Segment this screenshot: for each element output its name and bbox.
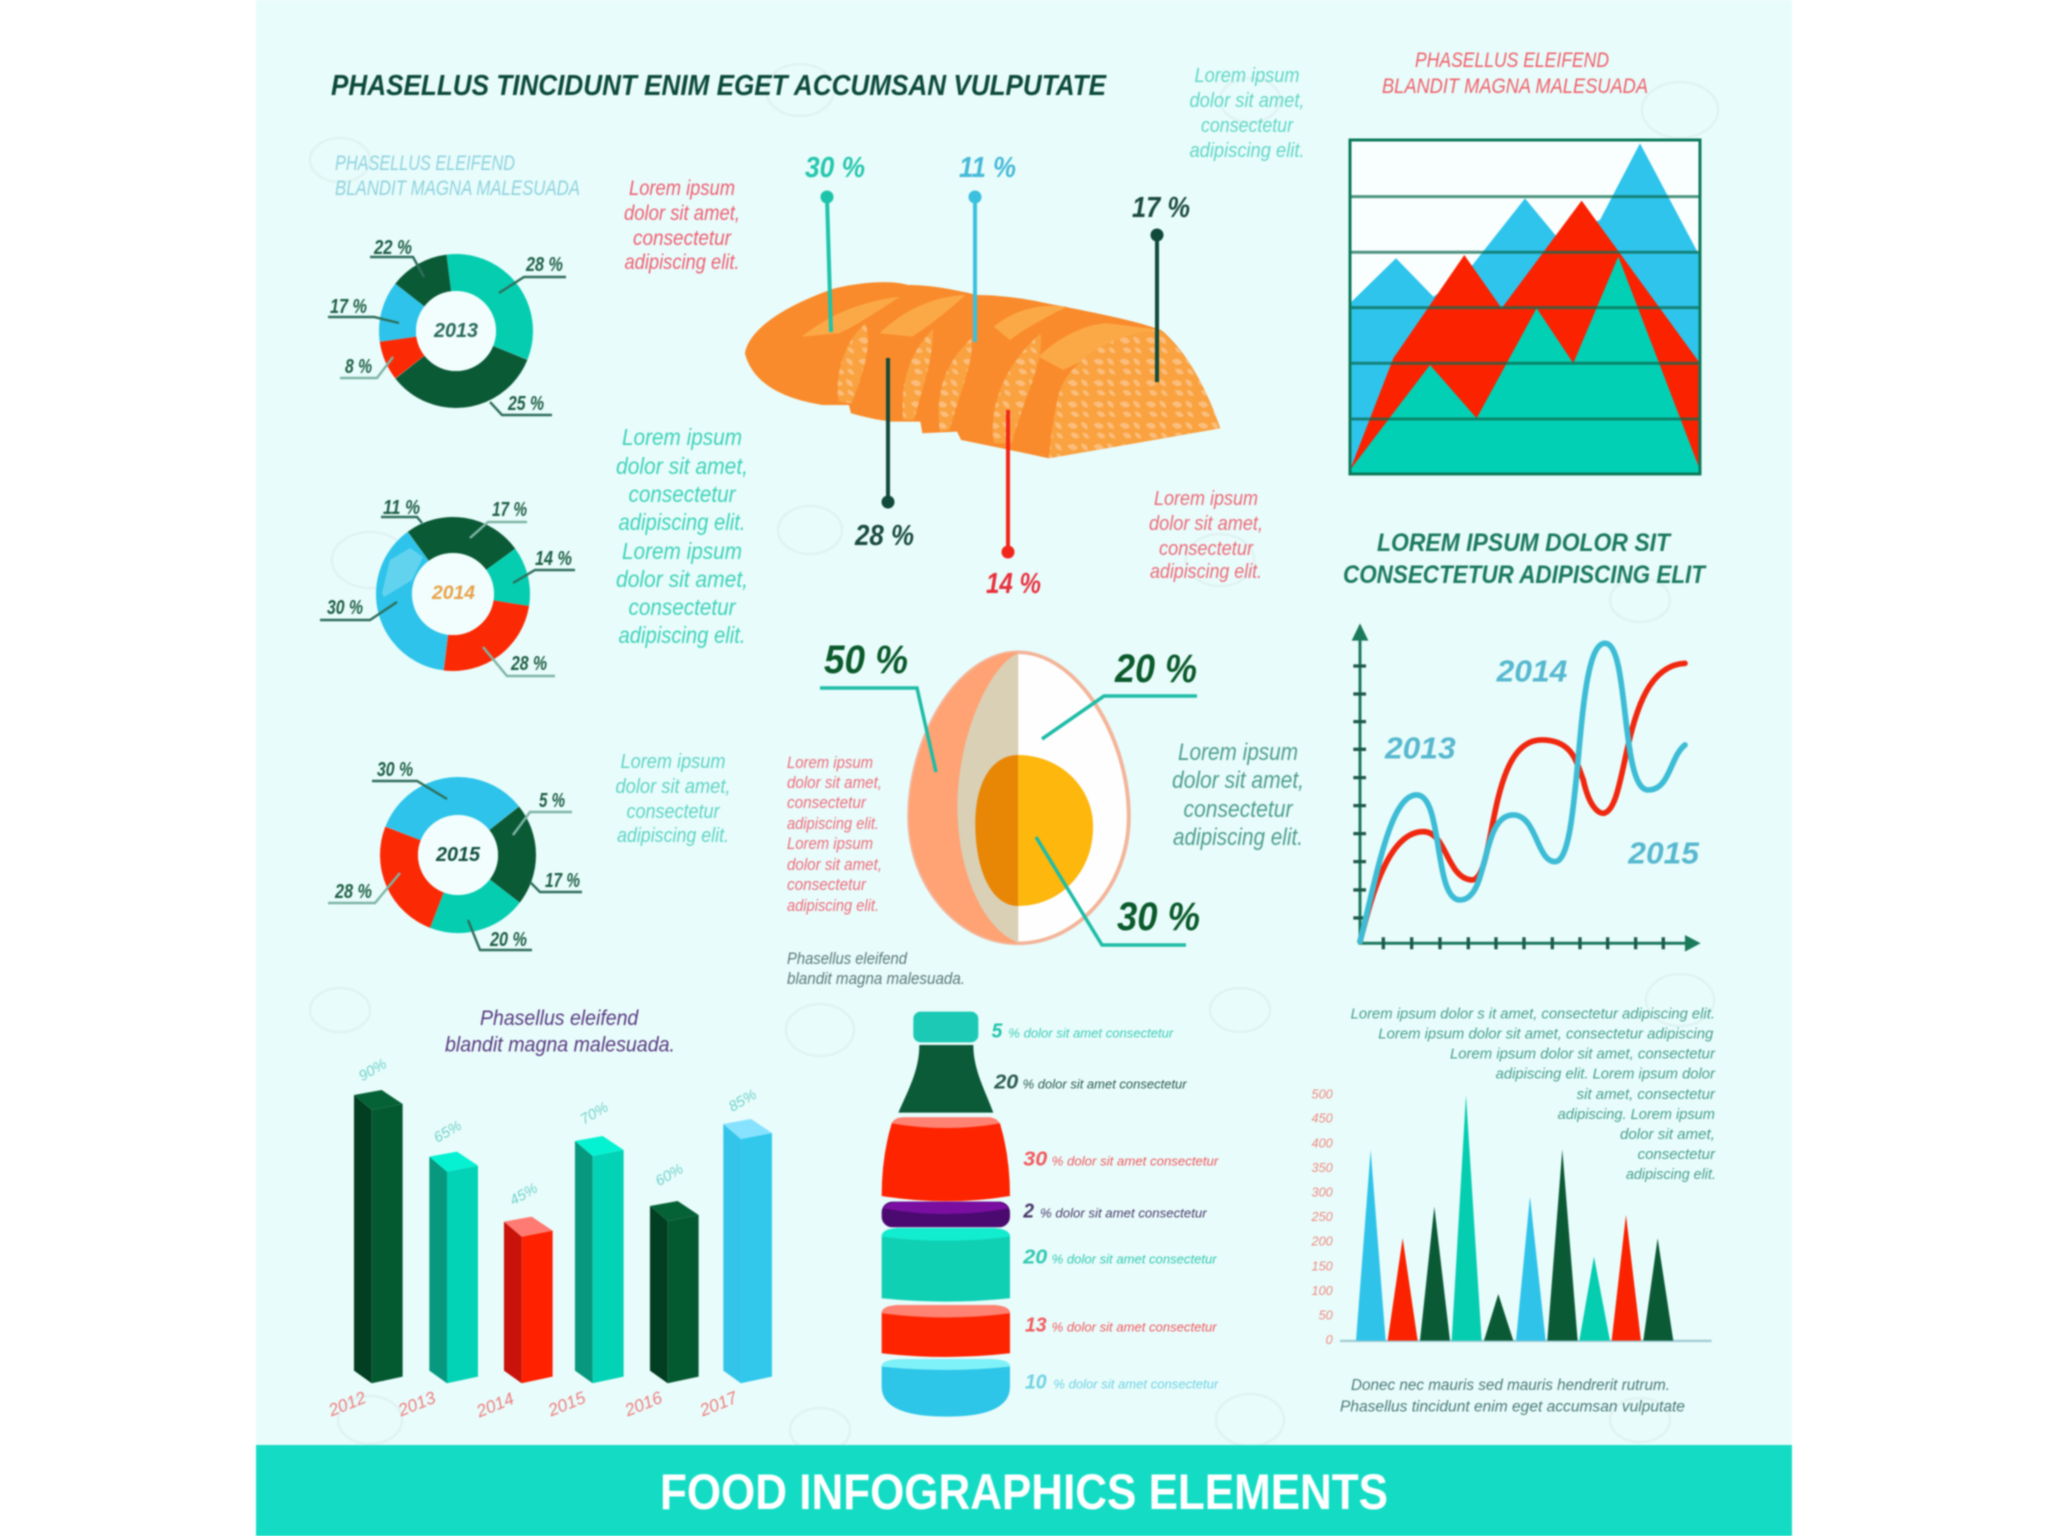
bottle row labels: 30	[1023, 1149, 1047, 1171]
bread pointer 28%	[854, 358, 914, 552]
text block: spike chart intro: dolor sit amet,	[1620, 1127, 1715, 1143]
y axis labels: 200	[1311, 1235, 1333, 1249]
text block: teal lorem top right: Lorem ipsum	[1194, 65, 1300, 87]
text block: red lorem beside bread: Lorem ipsum	[629, 177, 735, 200]
text block: egg left red	[787, 753, 882, 915]
donut chart 2013: 25 %	[507, 393, 544, 415]
text block: red lorem beside bread: adipiscing elit.	[624, 251, 740, 274]
egg callout 20%	[1042, 647, 1197, 739]
text block: egg left red: Lorem ipsum	[787, 834, 873, 853]
text block: red lorem under bread: consectetur	[1159, 538, 1254, 560]
text block: egg left red: consectetur	[787, 793, 867, 812]
text block: teal lorem lower: dolor sit amet,	[616, 776, 730, 798]
egg callout 30%	[1036, 837, 1200, 945]
text block: red lorem beside bread	[624, 177, 740, 274]
text block: spike chart intro	[1351, 1006, 1716, 1183]
text block: teal lorem lower: Lorem ipsum	[620, 751, 726, 773]
subheading: blue: BLANDIT MAGNA MALESUADA	[335, 177, 580, 200]
donut chart 2015: 28 %	[334, 881, 372, 903]
text block: egg caption	[787, 949, 965, 988]
bottle red lower	[882, 1305, 1010, 1357]
text block: egg caption: blandit magna malesuada.	[787, 969, 965, 988]
bottle row labels: % dolor sit amet consectetur	[1052, 1155, 1219, 1169]
text block: egg left red: adipiscing elit.	[787, 814, 879, 833]
bottle row labels: 10	[1025, 1371, 1047, 1393]
bar 2015	[575, 1136, 624, 1383]
text block: teal lorem eight lines: adipiscing elit.	[618, 509, 746, 535]
bottle row labels: % dolor sit amet consectetur	[1052, 1252, 1217, 1266]
y axis labels: 300	[1312, 1186, 1333, 1200]
bar year labels: 2016	[621, 1387, 665, 1421]
heading: bar chart: blandit magna malesuada.	[445, 1033, 675, 1057]
text block: red lorem beside bread: dolor sit amet,	[624, 202, 740, 225]
bottle row labels: 13	[1025, 1315, 1047, 1337]
heading: red area chart: PHASELLUS ELEIFEND	[1415, 49, 1609, 72]
text block: teal lorem eight lines: consectetur	[628, 481, 737, 507]
donut chart 2014	[320, 497, 575, 676]
donut chart 2014: 2014	[431, 583, 475, 604]
spike chart caption: Phasellus tincidunt enim eget accumsan vulputate	[1340, 1399, 1685, 1416]
egg callout 50%	[820, 638, 936, 772]
footer banner: FOOD INFOGRAPHICS ELEMENTS	[660, 1464, 1388, 1520]
bar year labels: 2013	[394, 1387, 439, 1421]
bar value labels: 90%	[356, 1056, 390, 1085]
line chart: 2015	[1627, 836, 1700, 870]
subheading: blue: PHASELLUS ELEIFEND	[335, 152, 515, 175]
text block: teal lorem eight lines: Lorem ipsum	[622, 538, 742, 564]
donut chart 2015: 20 %	[489, 929, 527, 951]
text block: red lorem beside bread: consectetur	[633, 227, 732, 250]
bar year labels	[325, 1387, 741, 1422]
bar value labels: 45%	[507, 1181, 541, 1209]
y axis labels: 150	[1312, 1259, 1333, 1273]
heading: bar chart	[445, 1006, 675, 1057]
bread pointer 11%: 11 %	[959, 152, 1016, 184]
text block: teal lorem lower: adipiscing elit.	[617, 825, 729, 847]
donut chart 2013: 22 %	[373, 237, 412, 259]
heading: line chart: LOREM IPSUM DOLOR SIT	[1377, 529, 1672, 557]
bar 2016	[650, 1201, 699, 1383]
text block: spike chart intro: Lorem ipsum dolor sit amet, consectetur adipiscing	[1378, 1026, 1714, 1042]
text block: teal lorem lower	[616, 751, 730, 847]
bottle teal section	[882, 1228, 1010, 1302]
text block: egg right	[1172, 739, 1304, 851]
bottle blue base	[882, 1359, 1010, 1417]
donut chart 2014: 30 %	[327, 597, 363, 619]
text block: red lorem under bread: dolor sit amet,	[1149, 513, 1263, 535]
text block: spike chart intro: adipiscing elit.	[1626, 1167, 1716, 1183]
bread pointer 30%	[805, 152, 865, 332]
donut chart 2013: 8 %	[345, 356, 372, 378]
bottle row labels: 2	[1022, 1200, 1034, 1222]
illustration: sliced bread	[745, 282, 1220, 458]
bottle row labels: 20	[1022, 1246, 1047, 1268]
text block: egg left red: Lorem ipsum	[787, 753, 873, 772]
text block: spike chart intro: Lorem ipsum dolor s it amet, consectetur adipiscing elit.	[1351, 1006, 1715, 1022]
donut chart 2015	[328, 759, 582, 951]
bar value labels: 60%	[653, 1161, 686, 1190]
text block: egg right: adipiscing elit.	[1173, 824, 1303, 851]
text block: teal lorem eight lines: dolor sit amet,	[616, 566, 748, 592]
bottle row labels: 20	[993, 1072, 1018, 1094]
text block: teal lorem top right: consectetur	[1201, 115, 1294, 137]
heading: red area chart: BLANDIT MAGNA MALESUADA	[1382, 75, 1648, 98]
page background	[256, 0, 1792, 1536]
spike chart caption	[1340, 1377, 1685, 1416]
donut chart 2015: 5 %	[539, 790, 565, 812]
y axis labels: 400	[1312, 1136, 1333, 1150]
bread pointer 14%: 14 %	[986, 568, 1041, 600]
line chart: 2013	[1384, 731, 1456, 765]
footer banner	[256, 1445, 1792, 1536]
illustration: boiled egg	[909, 652, 1129, 943]
egg callout 30%: 30 %	[1117, 895, 1200, 939]
text block: spike chart intro: adipiscing elit. Lorem ipsum dolor	[1496, 1066, 1716, 1082]
y axis labels: 350	[1312, 1161, 1333, 1175]
text block: teal lorem lower: consectetur	[626, 801, 721, 823]
text block: spike chart intro: sit amet, consectetur	[1577, 1087, 1716, 1103]
y axis labels: 250	[1311, 1210, 1333, 1224]
donut chart 2015: 2015	[435, 844, 481, 866]
line chart	[1352, 623, 1701, 952]
line chart: 2014	[1496, 655, 1567, 689]
y axis labels	[1311, 1087, 1333, 1347]
egg callout 50%: 50 %	[824, 638, 908, 682]
bar value labels: 70%	[578, 1100, 611, 1128]
bar year labels: 2012	[325, 1387, 369, 1421]
text block: egg right: consectetur	[1184, 796, 1293, 823]
heading: bar chart: Phasellus eleifend	[480, 1006, 639, 1030]
bar 2014	[504, 1217, 553, 1383]
heading: line chart: CONSECTETUR ADIPISCING ELIT	[1343, 561, 1707, 589]
bread pointer 17%	[1132, 192, 1190, 382]
donut chart 2014: 17 %	[492, 499, 527, 521]
bottle row labels: 5	[992, 1020, 1003, 1042]
y axis labels: 50	[1319, 1308, 1333, 1322]
bar 2012	[354, 1090, 403, 1383]
spikes	[1356, 1095, 1673, 1341]
text block: red lorem under bread	[1149, 488, 1263, 583]
illustration: layered bottle	[882, 1012, 1219, 1417]
text block: red lorem under bread: Lorem ipsum	[1154, 488, 1258, 510]
text block: egg left red: dolor sit amet,	[787, 773, 882, 792]
bar value labels	[356, 1056, 760, 1209]
bread pointer 30%: 30 %	[805, 152, 865, 184]
area chart	[1350, 140, 1700, 474]
text block: egg caption: Phasellus eleifend	[787, 949, 907, 968]
egg callout 20%: 20 %	[1114, 647, 1197, 691]
text block: teal lorem eight lines: Lorem ipsum	[622, 424, 742, 450]
text block: spike chart intro: adipiscing. Lorem ipsum	[1558, 1107, 1715, 1123]
text block: egg left red: adipiscing elit.	[787, 896, 879, 915]
text block: teal lorem top right	[1190, 65, 1304, 162]
bar value labels: 65%	[431, 1118, 465, 1146]
bar year labels: 2015	[544, 1387, 589, 1421]
text block: red lorem under bread: adipiscing elit.	[1150, 561, 1262, 583]
3D bar chart	[325, 1006, 772, 1422]
y axis labels: 450	[1312, 1112, 1333, 1126]
text block: egg right: dolor sit amet,	[1172, 767, 1304, 794]
bread pointer 17%: 17 %	[1132, 192, 1190, 224]
heading: line chart	[1343, 529, 1707, 589]
bottle row labels: % dolor sit amet consectetur	[1053, 1377, 1219, 1391]
bottle neck	[898, 1045, 993, 1113]
bottle row labels: % dolor sit amet consectetur	[1023, 1078, 1187, 1092]
bottle purple ring	[882, 1202, 1010, 1227]
bottle cap	[913, 1012, 978, 1042]
donut chart 2014: 14 %	[535, 548, 572, 570]
text block: teal lorem eight lines: consectetur	[628, 594, 737, 620]
spike chart	[1311, 1006, 1716, 1416]
text block: teal lorem eight lines: dolor sit amet,	[616, 453, 748, 479]
donut chart 2013: 28 %	[525, 254, 563, 276]
y axis labels: 500	[1312, 1087, 1333, 1101]
bread pointer 11%	[959, 152, 1016, 342]
donut chart 2014: 28 %	[510, 653, 547, 675]
bottle red upper	[882, 1117, 1010, 1201]
text block: egg left red: consectetur	[787, 875, 867, 894]
y axis labels: 100	[1312, 1284, 1333, 1298]
y axis labels: 0	[1326, 1333, 1333, 1347]
donut chart 2013: 17 %	[330, 296, 367, 318]
donut chart 2013: 2013	[433, 320, 478, 342]
text block: teal lorem eight lines: adipiscing elit.	[618, 622, 746, 648]
bottle row labels: % dolor sit amet consectetur	[1040, 1206, 1207, 1220]
donut chart 2015: 30 %	[377, 759, 413, 781]
bar year labels: 2014	[473, 1388, 517, 1422]
bar value labels: 85%	[726, 1087, 760, 1115]
text block: egg left red: dolor sit amet,	[787, 855, 882, 874]
bottle row labels: % dolor sit amet consectetur	[1052, 1321, 1217, 1335]
text block: teal lorem top right: dolor sit amet,	[1190, 90, 1304, 112]
bar year labels: 2017	[696, 1387, 741, 1421]
heading: red area chart	[1382, 49, 1648, 98]
text block: teal lorem top right: adipiscing elit.	[1190, 140, 1304, 162]
text block: egg right: Lorem ipsum	[1178, 739, 1298, 766]
bar 2017	[723, 1119, 772, 1383]
bar 2013	[429, 1152, 478, 1383]
text block: teal lorem eight lines	[616, 424, 748, 648]
donut chart 2014: 11 %	[383, 497, 420, 519]
subheading: blue	[335, 152, 580, 200]
text block: spike chart intro: Lorem ipsum dolor sit amet, consectetur	[1450, 1046, 1716, 1062]
bread pointer 28%: 28 %	[854, 520, 914, 552]
text block: spike chart intro: consectetur	[1638, 1147, 1716, 1163]
donut chart 2013	[328, 237, 566, 415]
main title: PHASELLUS TINCIDUNT ENIM EGET ACCUMSAN VULPUTATE	[331, 70, 1107, 102]
bottle row labels: % dolor sit amet consectetur	[1008, 1026, 1174, 1040]
donut chart 2015: 17 %	[545, 870, 580, 892]
bread pointer 14%	[986, 410, 1041, 600]
bottle row labels	[992, 1020, 1219, 1393]
spike chart caption: Donec nec mauris sed mauris hendrerit rutrum.	[1351, 1377, 1670, 1394]
